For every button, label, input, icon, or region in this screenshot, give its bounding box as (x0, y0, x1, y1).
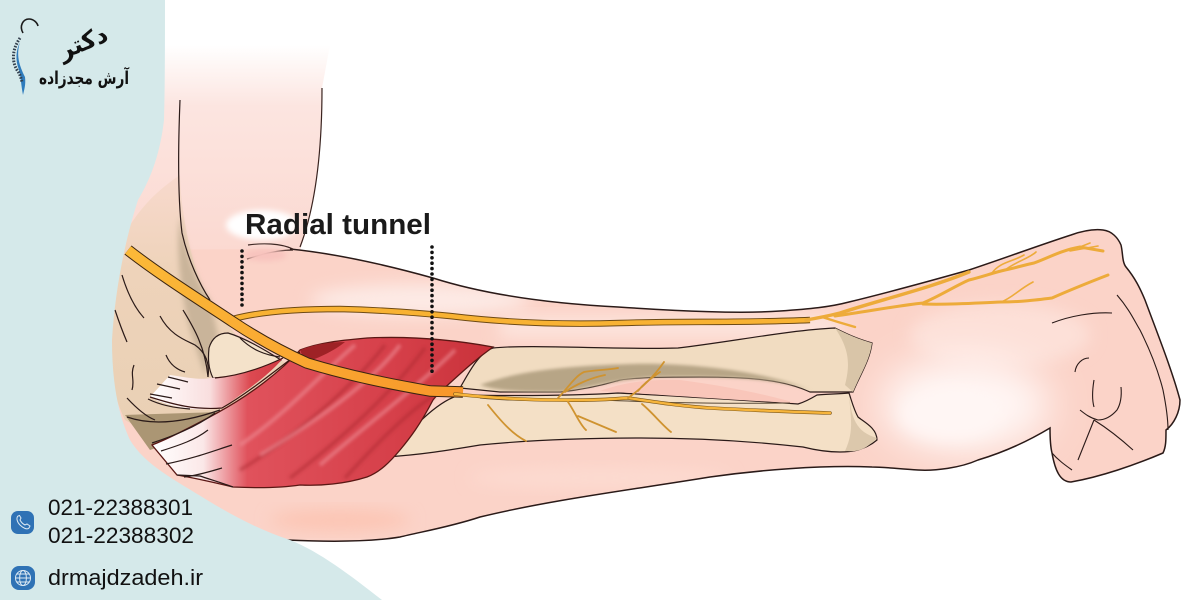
icon: globe (11, 566, 35, 590)
logo: spine (13, 19, 38, 95)
dotted marker: right (430, 247, 434, 375)
logo text: name: آرش مجدزاده (39, 66, 130, 89)
nerve branches in the forearm (455, 362, 830, 441)
upper arm skin (110, 45, 330, 250)
forearm and hand skin (100, 230, 1180, 541)
humerus and elbow joint (108, 100, 300, 470)
dotted marker: left (240, 251, 244, 308)
radial nerve, main trunk (128, 250, 463, 392)
label: Radial tunnel: Radial tunnel (245, 209, 431, 241)
contact: website: drmajdzadeh.ir (48, 565, 203, 590)
contact: phone numbers (48, 495, 194, 548)
extensor muscle (148, 337, 493, 488)
logo text: doctor: دکتر (53, 20, 112, 65)
contact: phone numbers: 021-22388301 (48, 495, 193, 520)
panel: left teal shape (0, 0, 382, 600)
illustration: forearm anatomy (100, 45, 1180, 541)
hand knuckle and finger lines (1052, 295, 1168, 470)
label glow (226, 210, 298, 240)
nerve branches in the wrist and hand (806, 243, 1108, 327)
radius and ulna bones (385, 328, 877, 457)
contact: phone numbers: 021-22388302 (48, 523, 194, 548)
icon: phone (11, 511, 34, 534)
radial nerve, upper branch (233, 309, 810, 324)
elbow crease (247, 88, 322, 259)
